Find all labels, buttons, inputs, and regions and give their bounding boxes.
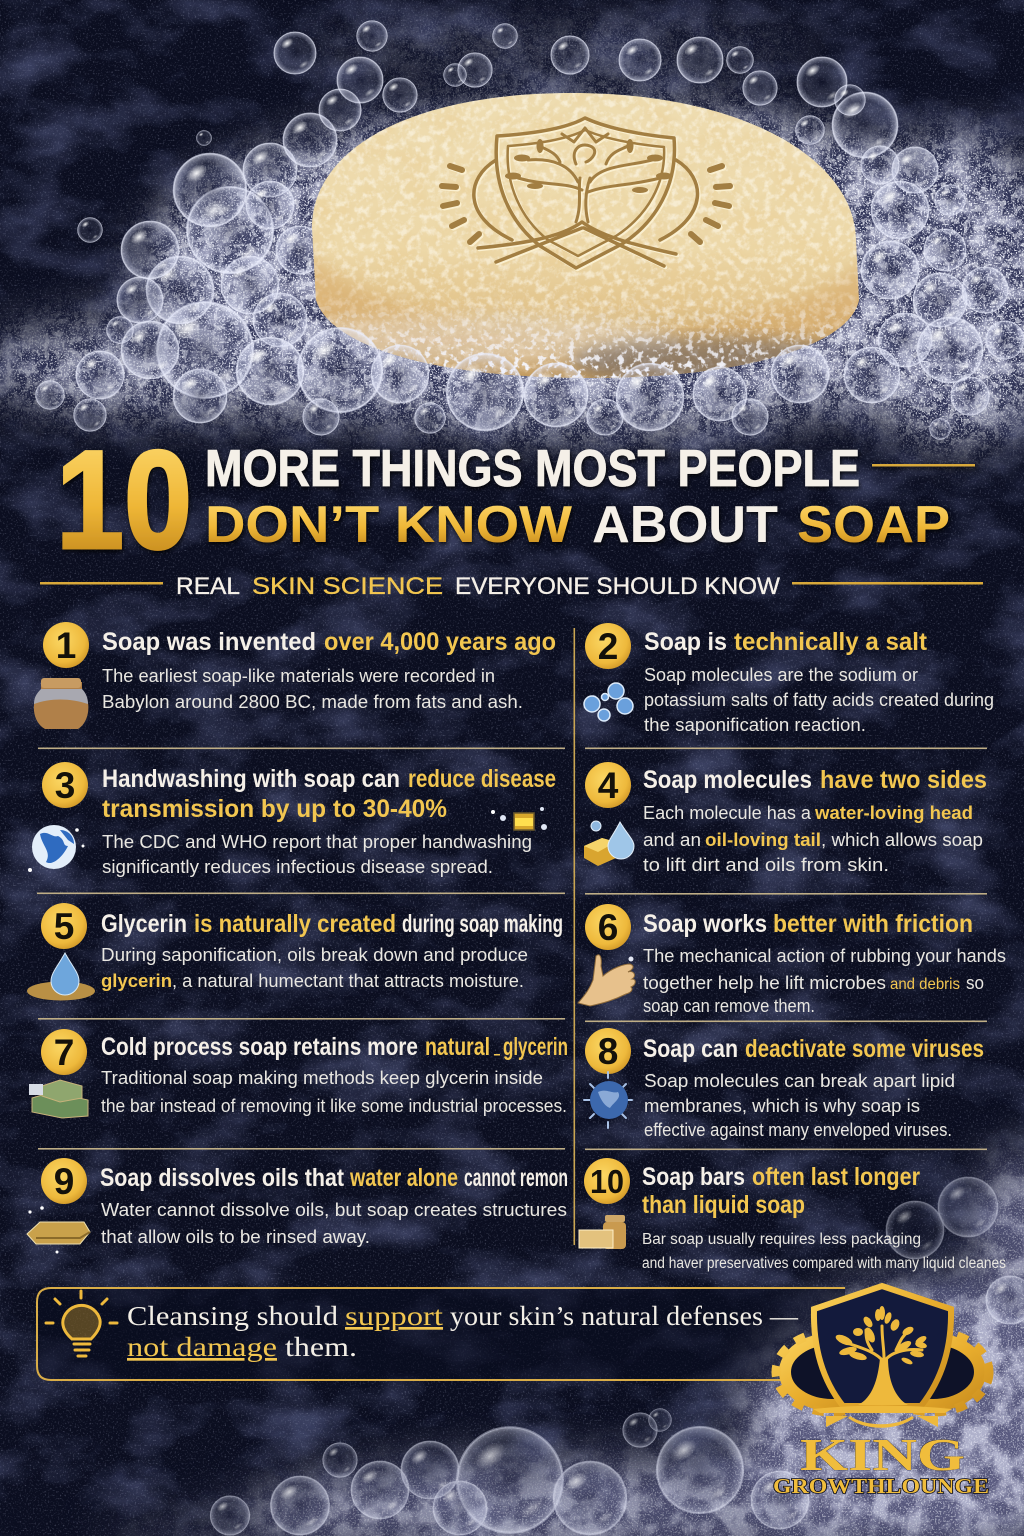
logo shield	[814, 1286, 951, 1406]
item 5: glycerin: , a natural humectant that attracts moisture.	[172, 971, 524, 991]
callout text	[127, 1301, 799, 1362]
title line two	[205, 496, 950, 554]
logo wordmark	[773, 1429, 989, 1498]
item 7: cold process: the bar instead of removing it like some industrial processes.	[101, 1096, 567, 1116]
item 9: dissolves oils: Soap dissolves oils that	[100, 1164, 345, 1192]
item 1: soap history: Soap was invented	[102, 628, 316, 656]
icon: gold soap bar	[27, 1206, 90, 1254]
item 6: friction: better with friction	[773, 910, 973, 938]
section dividers	[37, 628, 987, 1245]
subtitle	[40, 573, 983, 600]
bubbles behind item 10	[886, 1177, 998, 1259]
item 9: dissolves oils	[27, 1158, 568, 1254]
item 2: soap is a salt	[584, 623, 994, 735]
subtitle: EVERYONE SHOULD KNOW	[455, 573, 780, 600]
icon: small soap sparkle	[491, 807, 547, 830]
icon: rubbing hands	[578, 955, 635, 1006]
item 10: bars last longer: often last longer	[752, 1163, 920, 1191]
icon: water drop on dish	[27, 953, 95, 1000]
item 2: soap is a salt: technically a salt	[734, 628, 928, 656]
item 5: glycerin	[27, 903, 563, 1000]
item 1: soap history: 1	[56, 625, 76, 666]
foam at the bottom of the page	[101, 1120, 1024, 1536]
item 7: cold process: Cold process soap retains more	[101, 1033, 418, 1061]
item 5: glycerin: Glycerin	[101, 910, 187, 938]
item 1: soap history: The earliest soap-like materials were recorded in	[102, 666, 495, 686]
item 8: viruses: Soap can	[643, 1035, 738, 1063]
item 2: soap is a salt: 2	[598, 626, 618, 667]
item 3: handwashing	[28, 762, 556, 877]
item 7: cold process	[29, 1029, 568, 1118]
item 8: viruses: membranes, which is why soap is	[644, 1096, 920, 1116]
icon: stacked soap bars	[29, 1080, 88, 1118]
item 4: two sides: water-loving head	[814, 803, 973, 823]
logo gears	[776, 1332, 989, 1412]
icon: soap bars and bottle	[579, 1215, 626, 1249]
subtitle: SKIN SCIENCE	[252, 573, 443, 600]
item 1: soap history: over 4,000 years ago	[324, 628, 556, 656]
item 5: glycerin: is naturally created	[194, 910, 396, 938]
item 4: two sides: oil-loving tail	[705, 830, 821, 850]
item 3: handwashing: The CDC and WHO report that proper handwashing	[102, 832, 532, 852]
item 10: bars last longer: than liquid soap	[642, 1191, 805, 1219]
item 9: dissolves oils: Water cannot dissolve oils, but soap creates structures	[101, 1200, 567, 1220]
item 8: viruses: effective against many enveloped viruses.	[644, 1120, 952, 1140]
title	[56, 421, 975, 578]
item 4: two sides: have two sides	[820, 766, 987, 794]
big number 10: 10	[56, 421, 192, 578]
item 5: glycerin: 5	[54, 906, 74, 947]
item 9: dissolves oils: 9	[54, 1161, 74, 1202]
subtitle: REAL	[176, 573, 240, 600]
item 6: friction: soap can remove them.	[643, 996, 815, 1016]
callout text: your skin’s natural defenses —	[450, 1301, 799, 1331]
item 5: glycerin: glycerin	[101, 971, 172, 991]
item 9: dissolves oils: that allow oils to be rinsed away.	[101, 1227, 370, 1247]
item 2: soap is a salt: Soap is	[644, 628, 727, 656]
icon: globe	[28, 825, 84, 872]
item 2: soap is a salt: the saponification reaction.	[644, 715, 866, 735]
logo tree	[834, 1306, 928, 1405]
title line one: MORE THINGS MOST PEOPLE	[205, 440, 860, 498]
item 8: viruses	[584, 1028, 984, 1140]
item 7: cold process: natural	[425, 1033, 490, 1061]
item 4: two sides: and an	[643, 830, 701, 850]
item 6: friction: and debris	[890, 976, 960, 993]
item 6: friction: together help he lift microbes	[643, 973, 886, 993]
item 4: two sides: 4	[598, 765, 619, 806]
item 10: bars last longer	[579, 1158, 1006, 1272]
bubbles around the soap	[36, 21, 1024, 440]
logo	[773, 1286, 989, 1498]
soap emblem: shield, gears and tree	[442, 118, 732, 270]
logo banner	[813, 1406, 952, 1428]
item 10: bars last longer: 10	[590, 1163, 624, 1200]
item 3: handwashing: 3	[55, 765, 75, 806]
item 9: dissolves oils: water alone	[349, 1164, 458, 1192]
foam behind the soap	[0, 0, 1024, 482]
item 4: two sides: , which allows soap	[821, 830, 983, 850]
item 5: glycerin: during soap making	[402, 910, 563, 938]
item 3: handwashing: significantly reduces infectious disease spread.	[102, 857, 493, 877]
bubbles in front of the soap	[173, 328, 989, 435]
item 5: glycerin: During saponification, oils break down and produce	[101, 945, 528, 965]
callout text: them.	[285, 1332, 357, 1362]
item 6: friction: Soap works	[643, 910, 767, 938]
item 10: bars last longer: Soap bars	[642, 1163, 745, 1191]
logo wordmark: GROWTHLOUNGE	[773, 1474, 989, 1498]
item 3: handwashing: reduce disease	[408, 765, 556, 793]
item 4: two sides	[584, 762, 987, 875]
item 10: bars last longer: Bar soap usually requires less packaging	[642, 1231, 921, 1248]
callout text: not damage	[127, 1332, 277, 1362]
item 7: cold process: 7	[54, 1032, 74, 1073]
title line two: DON’T KNOW	[205, 496, 573, 554]
icon: virus	[584, 1072, 632, 1128]
item 7: cold process: Traditional soap making methods keep glycerin inside	[101, 1068, 543, 1088]
item 2: soap is a salt: Soap molecules are the sodium or	[644, 665, 918, 685]
icon: molecule bubbles	[584, 683, 633, 721]
item 6: friction: The mechanical action of rubbing your hands	[643, 946, 1006, 966]
item 6: friction	[578, 904, 1006, 1016]
item 1: soap history: Babylon around 2800 BC, made from fats and ash.	[102, 692, 523, 712]
item 8: viruses: Soap molecules can break apart lipid	[644, 1071, 955, 1091]
icon: light bulb	[46, 1291, 117, 1356]
callout text: Cleansing should	[127, 1301, 339, 1331]
item 1: soap history	[34, 622, 556, 729]
item 8: viruses: 8	[598, 1031, 618, 1072]
callout text: support	[345, 1301, 444, 1331]
item 9: dissolves oils: cannot remon	[464, 1164, 568, 1192]
item 3: handwashing: Handwashing with soap can	[102, 765, 400, 793]
item 6: friction: 6	[598, 907, 618, 948]
icon: gold soap and water drop	[584, 821, 634, 866]
soap bar	[312, 93, 859, 378]
title line two: SOAP	[797, 496, 950, 554]
callout	[37, 1288, 845, 1380]
bottom bubbles	[210, 1276, 1024, 1535]
item 2: soap is a salt: potassium salts of fatty acids created during	[644, 690, 994, 710]
logo wordmark: KING	[800, 1429, 965, 1480]
item 6: friction: so	[966, 973, 984, 993]
item 4: two sides: Each molecule has a	[643, 803, 812, 823]
icon: jar	[34, 678, 88, 729]
item 4: two sides: to lift dirt and oils from skin.	[643, 855, 889, 875]
item 3: handwashing: transmission by up to 30-40%	[102, 795, 447, 823]
title line two: ABOUT	[592, 496, 778, 554]
item 4: two sides: Soap molecules	[643, 766, 812, 794]
item 7: cold process: glycerin	[503, 1033, 568, 1061]
